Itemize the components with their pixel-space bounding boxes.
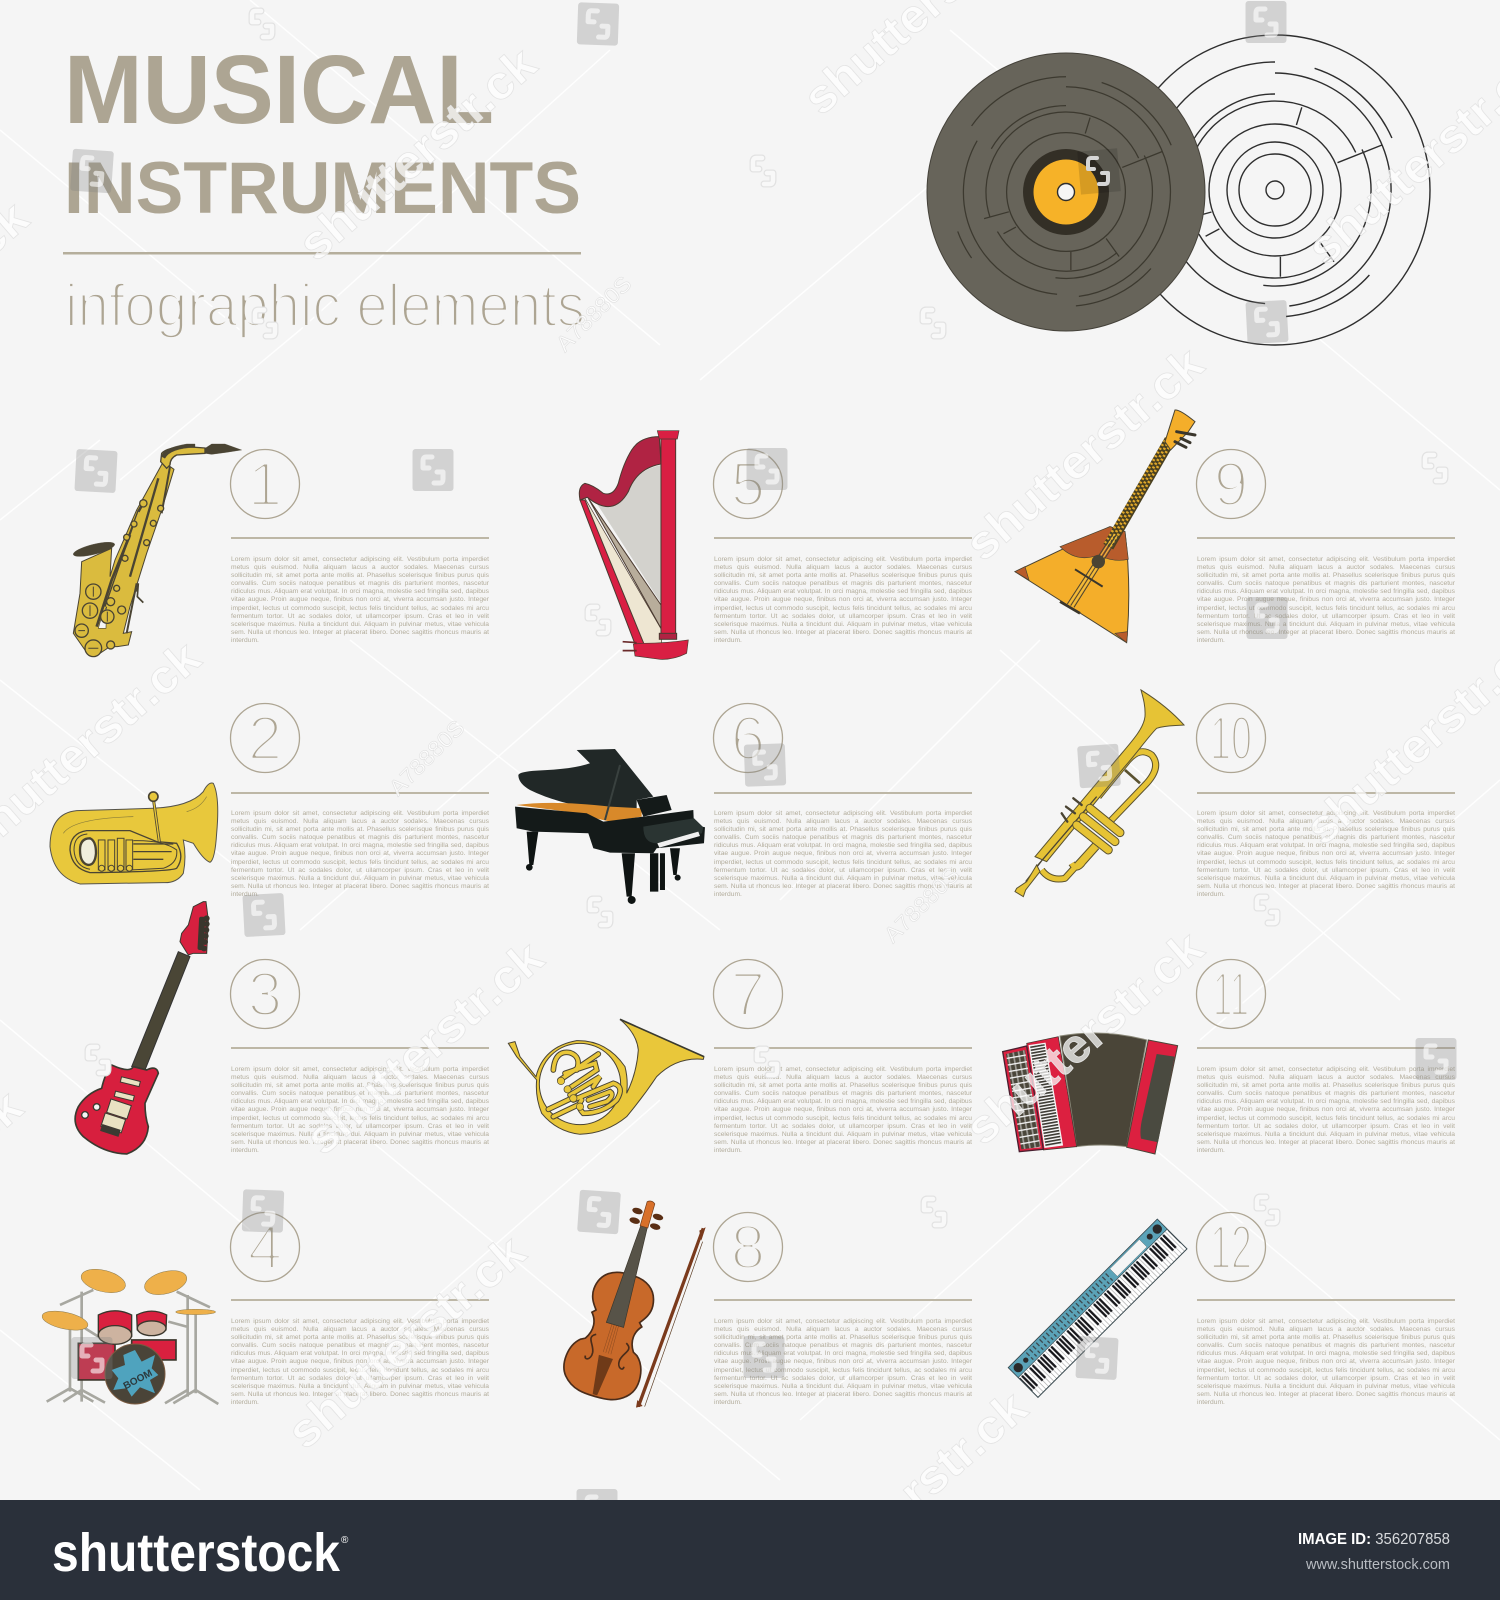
text block 10: imperdiet, lectus ut commodo suscipit, lectus felis tincidunt tellus, ac sodales mi arcu [1197, 859, 1455, 866]
text block 2 [231, 810, 489, 898]
text block 7: ridiculus mus. Aliquam erat volutpat. In orci magna, molestie sed fringilla sed, dapibus [714, 1098, 972, 1105]
text block 1: scelerisque maximus. Nulla a tincidunt dui. Aliquam in pulvinar metus, vitae vehicula [231, 621, 489, 628]
text block 10: Lorem ipsum dolor sit amet, consectetur adipiscing elit. Vestibulum porta imperdiet [1197, 810, 1455, 817]
text block 1: convallis. Cum sociis natoque penatibus et magnis dis parturient montes, nascetur [231, 580, 489, 587]
watermark: image code repeats: A78880S [551, 271, 636, 357]
text block 1: fermentum tortor. Ut ac sodales dolor, ut ullamcorper ipsum. Cras et leo in velit [231, 613, 489, 620]
subtitle: infographic elements: infographic elements [65, 272, 585, 339]
text block 1: ridiculus mus. Aliquam erat volutpat. In orci magna, molestie sed fringilla sed, dapibus [231, 588, 489, 595]
text block 3: sollicitudin mi, sit amet porta ante mollis at. Phasellus scelerisque finibus purus quis [231, 1082, 489, 1089]
text block 8 [714, 1318, 972, 1406]
text block 2: Lorem ipsum dolor sit amet, consectetur adipiscing elit. Vestibulum porta imperdiet [231, 810, 489, 817]
text block 5: Lorem ipsum dolor sit amet, consectetur adipiscing elit. Vestibulum porta imperdiet [714, 556, 972, 563]
number badge 5 [714, 450, 782, 520]
text block 6: sollicitudin mi, sit amet porta ante mollis at. Phasellus scelerisque finibus purus quis [714, 826, 972, 833]
title divider rule [63, 252, 581, 254]
text block 3: ridiculus mus. Aliquam erat volutpat. In orci magna, molestie sed fringilla sed, dapibus [231, 1098, 489, 1105]
text block 11: sollicitudin mi, sit amet porta ante mollis at. Phasellus scelerisque finibus purus quis [1197, 1082, 1455, 1089]
number badge 7 [714, 960, 782, 1030]
text block 3: sem. Nulla ut rhoncus leo. Integer at placerat libero. Donec sagittis rhoncus mauris at [231, 1139, 489, 1146]
text block 7 [714, 1066, 972, 1154]
icon: vinyl record [927, 53, 1205, 331]
icon: electric guitar [75, 902, 210, 1154]
footer registered mark: ® [341, 1535, 349, 1546]
text block 9: sollicitudin mi, sit amet porta ante mollis at. Phasellus scelerisque finibus purus quis [1197, 572, 1455, 579]
text block 6: interdum. [714, 891, 742, 898]
text block 4: metus quis euismod. Nulla aliquam lacus a auctor sodales. Maecenas cursus [231, 1326, 489, 1333]
watermark: shutterstock repeats: shutterstr.ck [955, 336, 1214, 571]
text block 10: ridiculus mus. Aliquam erat volutpat. In orci magna, molestie sed fringilla sed, dapibus [1197, 842, 1455, 849]
text block 1: metus quis euismod. Nulla aliquam lacus a auctor sodales. Maecenas cursus [231, 564, 489, 571]
icon: accordion [1003, 1033, 1178, 1154]
title: MUSICAL: MUSICAL [64, 35, 494, 144]
text block 5: vitae augue. Proin augue neque, finibus non orci at, viverra accumsan justo. Integer [714, 596, 972, 603]
text block 3: metus quis euismod. Nulla aliquam lacus a auctor sodales. Maecenas cursus [231, 1074, 489, 1081]
icon: harp [579, 431, 688, 659]
text block 11 [1197, 1066, 1455, 1154]
icon: outline record disc [1120, 35, 1430, 345]
watermark: image code repeats [384, 271, 964, 948]
text block 7: fermentum tortor. Ut ac sodales dolor, ut ullamcorper ipsum. Cras et leo in velit [714, 1123, 972, 1130]
text block 6: metus quis euismod. Nulla aliquam lacus a auctor sodales. Maecenas cursus [714, 818, 972, 825]
footer logo: shutterstock [52, 1523, 341, 1583]
text block 4: convallis. Cum sociis natoque penatibus et magnis dis parturient montes, nascetur [231, 1342, 489, 1349]
text block 1: sem. Nulla ut rhoncus leo. Integer at placerat libero. Donec sagittis rhoncus mauris at [231, 629, 489, 636]
text block 1: sollicitudin mi, sit amet porta ante mollis at. Phasellus scelerisque finibus purus quis [231, 572, 489, 579]
text block 11: vitae augue. Proin augue neque, finibus non orci at, viverra accumsan justo. Integer [1197, 1106, 1455, 1113]
text block 8: imperdiet, lectus ut commodo suscipit, lectus felis tincidunt tellus, ac sodales mi arcu [714, 1367, 972, 1374]
text block 11: imperdiet, lectus ut commodo suscipit, lectus felis tincidunt tellus, ac sodales mi arcu [1197, 1115, 1455, 1122]
text block 9: Lorem ipsum dolor sit amet, consectetur adipiscing elit. Vestibulum porta imperdiet [1197, 556, 1455, 563]
text block 11: sem. Nulla ut rhoncus leo. Integer at placerat libero. Donec sagittis rhoncus mauris at [1197, 1139, 1455, 1146]
number badge 5: 5 [731, 450, 765, 520]
text block 9: metus quis euismod. Nulla aliquam lacus a auctor sodales. Maecenas cursus [1197, 564, 1455, 571]
text block 9: sem. Nulla ut rhoncus leo. Integer at placerat libero. Donec sagittis rhoncus mauris at [1197, 629, 1455, 636]
number badge 11 [1196, 960, 1266, 1030]
text block 3: scelerisque maximus. Nulla a tincidunt dui. Aliquam in pulvinar metus, vitae vehicula [231, 1131, 489, 1138]
text block 7: scelerisque maximus. Nulla a tincidunt dui. Aliquam in pulvinar metus, vitae vehicula [714, 1131, 972, 1138]
text block 5: sem. Nulla ut rhoncus leo. Integer at placerat libero. Donec sagittis rhoncus mauris at [714, 629, 972, 636]
text block 4: ridiculus mus. Aliquam erat volutpat. In orci magna, molestie sed fringilla sed, dapibus [231, 1350, 489, 1357]
text block 4: scelerisque maximus. Nulla a tincidunt dui. Aliquam in pulvinar metus, vitae vehicula [231, 1383, 489, 1390]
text block 4: Lorem ipsum dolor sit amet, consectetur adipiscing elit. Vestibulum porta imperdiet [231, 1318, 489, 1325]
text block 7: interdum. [714, 1147, 742, 1154]
text block 4: imperdiet, lectus ut commodo suscipit, lectus felis tincidunt tellus, ac sodales mi arcu [231, 1367, 489, 1374]
text block 5: scelerisque maximus. Nulla a tincidunt dui. Aliquam in pulvinar metus, vitae vehicula [714, 621, 972, 628]
text block 2: interdum. [231, 891, 259, 898]
text block 8: interdum. [714, 1399, 742, 1406]
number badge 3 [230, 960, 300, 1030]
watermark: image code repeats: A78880S [384, 715, 469, 801]
text block 12: Lorem ipsum dolor sit amet, consectetur adipiscing elit. Vestibulum porta imperdiet [1197, 1318, 1455, 1325]
icon: violin and bow [557, 1190, 706, 1408]
text block 10: sem. Nulla ut rhoncus leo. Integer at placerat libero. Donec sagittis rhoncus mauris at [1197, 883, 1455, 890]
text block 6: Lorem ipsum dolor sit amet, consectetur adipiscing elit. Vestibulum porta imperdiet [714, 810, 972, 817]
text block 9: scelerisque maximus. Nulla a tincidunt dui. Aliquam in pulvinar metus, vitae vehicula [1197, 621, 1455, 628]
text block 6 [714, 810, 972, 898]
text block 12: convallis. Cum sociis natoque penatibus et magnis dis parturient montes, nascetur [1197, 1342, 1455, 1349]
text block 9 [1197, 556, 1455, 644]
text block 1: imperdiet, lectus ut commodo suscipit, lectus felis tincidunt tellus, ac sodales mi arcu [231, 605, 489, 612]
icon: grand piano [515, 749, 705, 904]
icon: drum kit [40, 1265, 218, 1404]
text block 6: scelerisque maximus. Nulla a tincidunt dui. Aliquam in pulvinar metus, vitae vehicula [714, 875, 972, 882]
watermark: image code repeats: A78880S [879, 862, 964, 948]
text block 2: sem. Nulla ut rhoncus leo. Integer at placerat libero. Donec sagittis rhoncus mauris at [231, 883, 489, 890]
text block 2: convallis. Cum sociis natoque penatibus et magnis dis parturient montes, nascetur [231, 834, 489, 841]
text block 5: fermentum tortor. Ut ac sodales dolor, ut ullamcorper ipsum. Cras et leo in velit [714, 613, 972, 620]
text block 10: fermentum tortor. Ut ac sodales dolor, ut ullamcorper ipsum. Cras et leo in velit [1197, 867, 1455, 874]
number badge 1 [230, 450, 300, 520]
text block 3: interdum. [231, 1147, 259, 1154]
text block 12: sem. Nulla ut rhoncus leo. Integer at placerat libero. Donec sagittis rhoncus mauris at [1197, 1391, 1455, 1398]
text block 5: imperdiet, lectus ut commodo suscipit, lectus felis tincidunt tellus, ac sodales mi arcu [714, 605, 972, 612]
text block 6: fermentum tortor. Ut ac sodales dolor, ut ullamcorper ipsum. Cras et leo in velit [714, 867, 972, 874]
text block 11: metus quis euismod. Nulla aliquam lacus a auctor sodales. Maecenas cursus [1197, 1074, 1455, 1081]
text block 2: metus quis euismod. Nulla aliquam lacus a auctor sodales. Maecenas cursus [231, 818, 489, 825]
icon: drum kit: BOOM [122, 1368, 154, 1392]
text block 1: Lorem ipsum dolor sit amet, consectetur adipiscing elit. Vestibulum porta imperdiet [231, 556, 489, 563]
text block 5: metus quis euismod. Nulla aliquam lacus a auctor sodales. Maecenas cursus [714, 564, 972, 571]
watermark: shutterstock repeats: shutterstr.ck [295, 930, 554, 1165]
text block 3: vitae augue. Proin augue neque, finibus non orci at, viverra accumsan justo. Integer [231, 1106, 489, 1113]
text block 9: imperdiet, lectus ut commodo suscipit, lectus felis tincidunt tellus, ac sodales mi arcu [1197, 605, 1455, 612]
text block 3: convallis. Cum sociis natoque penatibus et magnis dis parturient montes, nascetur [231, 1090, 489, 1097]
text block 5: convallis. Cum sociis natoque penatibus et magnis dis parturient montes, nascetur [714, 580, 972, 587]
text block 11: ridiculus mus. Aliquam erat volutpat. In orci magna, molestie sed fringilla sed, dapibus [1197, 1098, 1455, 1105]
number badge 10: 10 [1210, 704, 1252, 774]
text block 11: interdum. [1197, 1147, 1225, 1154]
watermark: outline logos [88, 11, 1445, 1225]
number badge 4 [230, 1212, 300, 1282]
footer image id: IMAGE ID: 356207858 [1298, 1531, 1450, 1548]
text block 6: vitae augue. Proin augue neque, finibus non orci at, viverra accumsan justo. Integer [714, 850, 972, 857]
icon: french horn [508, 1019, 704, 1134]
text block 12: sollicitudin mi, sit amet porta ante mollis at. Phasellus scelerisque finibus purus quis [1197, 1334, 1455, 1341]
text block 3: fermentum tortor. Ut ac sodales dolor, ut ullamcorper ipsum. Cras et leo in velit [231, 1123, 489, 1130]
text block 7: sollicitudin mi, sit amet porta ante mollis at. Phasellus scelerisque finibus purus quis [714, 1082, 972, 1089]
text block 5: ridiculus mus. Aliquam erat volutpat. In orci magna, molestie sed fringilla sed, dapibus [714, 588, 972, 595]
text block 10 [1197, 810, 1455, 898]
title: INSTRUMENTS: INSTRUMENTS [64, 148, 581, 229]
text block 8: vitae augue. Proin augue neque, finibus non orci at, viverra accumsan justo. Integer [714, 1358, 972, 1365]
text block 2: vitae augue. Proin augue neque, finibus non orci at, viverra accumsan justo. Integer [231, 850, 489, 857]
text block 7: sem. Nulla ut rhoncus leo. Integer at placerat libero. Donec sagittis rhoncus mauris at [714, 1139, 972, 1146]
number badge 12 [1196, 1212, 1266, 1282]
icon: balalaika [1015, 410, 1195, 643]
text block 6: imperdiet, lectus ut commodo suscipit, lectus felis tincidunt tellus, ac sodales mi arcu [714, 859, 972, 866]
text block 12: ridiculus mus. Aliquam erat volutpat. In orci magna, molestie sed fringilla sed, dapibus [1197, 1350, 1455, 1357]
text block 5: interdum. [714, 637, 742, 644]
number badge 1: 1 [248, 450, 282, 520]
text block 11: convallis. Cum sociis natoque penatibus et magnis dis parturient montes, nascetur [1197, 1090, 1455, 1097]
number badge 12: 12 [1210, 1214, 1252, 1282]
text block 8: fermentum tortor. Ut ac sodales dolor, ut ullamcorper ipsum. Cras et leo in velit [714, 1375, 972, 1382]
number badge 11: 11 [1213, 960, 1249, 1030]
text block 11: Lorem ipsum dolor sit amet, consectetur adipiscing elit. Vestibulum porta imperdiet [1197, 1066, 1455, 1073]
number badge 4: 4 [248, 1214, 282, 1282]
text block 4: sem. Nulla ut rhoncus leo. Integer at placerat libero. Donec sagittis rhoncus mauris at [231, 1391, 489, 1398]
text block 4: interdum. [231, 1399, 259, 1406]
text block 3: Lorem ipsum dolor sit amet, consectetur adipiscing elit. Vestibulum porta imperdiet [231, 1066, 489, 1073]
text block 8: sollicitudin mi, sit amet porta ante mollis at. Phasellus scelerisque finibus purus quis [714, 1334, 972, 1341]
text block 5: sollicitudin mi, sit amet porta ante mollis at. Phasellus scelerisque finibus purus quis [714, 572, 972, 579]
text block 10: interdum. [1197, 891, 1225, 898]
text block 10: metus quis euismod. Nulla aliquam lacus a auctor sodales. Maecenas cursus [1197, 818, 1455, 825]
icon: electronic keyboard [1008, 1219, 1187, 1397]
number badge 10 [1196, 704, 1266, 774]
text block 3: imperdiet, lectus ut commodo suscipit, lectus felis tincidunt tellus, ac sodales mi arcu [231, 1115, 489, 1122]
text block 1 [231, 556, 489, 644]
text block 8: Lorem ipsum dolor sit amet, consectetur adipiscing elit. Vestibulum porta imperdiet [714, 1318, 972, 1325]
text block 8: sem. Nulla ut rhoncus leo. Integer at placerat libero. Donec sagittis rhoncus mauris at [714, 1391, 972, 1398]
text block 11: fermentum tortor. Ut ac sodales dolor, ut ullamcorper ipsum. Cras et leo in velit [1197, 1123, 1455, 1130]
text block 2: scelerisque maximus. Nulla a tincidunt dui. Aliquam in pulvinar metus, vitae vehicula [231, 875, 489, 882]
text block 4 [231, 1318, 489, 1406]
text block 7: vitae augue. Proin augue neque, finibus non orci at, viverra accumsan justo. Integer [714, 1106, 972, 1113]
number badge 8: 8 [731, 1214, 765, 1282]
text block 5 [714, 556, 972, 644]
text block 1: interdum. [231, 637, 259, 644]
footer bar [0, 1500, 1500, 1600]
text block 10: vitae augue. Proin augue neque, finibus non orci at, viverra accumsan justo. Integer [1197, 850, 1455, 857]
number badge 6: 6 [731, 704, 765, 774]
watermark: shutterstock repeats: shutterstr.ck [955, 920, 1214, 1155]
watermark: shutterstock repeats: shutterstr.ck [277, 1224, 536, 1459]
text block 4: vitae augue. Proin augue neque, finibus non orci at, viverra accumsan justo. Integer [231, 1358, 489, 1365]
text block 8: metus quis euismod. Nulla aliquam lacus a auctor sodales. Maecenas cursus [714, 1326, 972, 1333]
text block 3 [231, 1066, 489, 1154]
text block 2: fermentum tortor. Ut ac sodales dolor, ut ullamcorper ipsum. Cras et leo in velit [231, 867, 489, 874]
footer url: www.shutterstock.com [1305, 1556, 1450, 1573]
text block 11: scelerisque maximus. Nulla a tincidunt dui. Aliquam in pulvinar metus, vitae vehicula [1197, 1131, 1455, 1138]
number badge 7: 7 [731, 960, 765, 1030]
text block 6: convallis. Cum sociis natoque penatibus et magnis dis parturient montes, nascetur [714, 834, 972, 841]
text block 1: vitae augue. Proin augue neque, finibus non orci at, viverra accumsan justo. Integer [231, 596, 489, 603]
text block 12: vitae augue. Proin augue neque, finibus non orci at, viverra accumsan justo. Integer [1197, 1358, 1455, 1365]
text block 2: sollicitudin mi, sit amet porta ante mollis at. Phasellus scelerisque finibus purus quis [231, 826, 489, 833]
number badge 2: 2 [248, 704, 282, 774]
text block 12: scelerisque maximus. Nulla a tincidunt dui. Aliquam in pulvinar metus, vitae vehicula [1197, 1383, 1455, 1390]
text block 4: fermentum tortor. Ut ac sodales dolor, ut ullamcorper ipsum. Cras et leo in velit [231, 1375, 489, 1382]
text block 12: imperdiet, lectus ut commodo suscipit, lectus felis tincidunt tellus, ac sodales mi arcu [1197, 1367, 1455, 1374]
text block 2: imperdiet, lectus ut commodo suscipit, lectus felis tincidunt tellus, ac sodales mi arcu [231, 859, 489, 866]
text block 8: scelerisque maximus. Nulla a tincidunt dui. Aliquam in pulvinar metus, vitae vehicula [714, 1383, 972, 1390]
text block 10: convallis. Cum sociis natoque penatibus et magnis dis parturient montes, nascetur [1197, 834, 1455, 841]
text block 12 [1197, 1318, 1455, 1406]
text block 9: ridiculus mus. Aliquam erat volutpat. In orci magna, molestie sed fringilla sed, dapibus [1197, 588, 1455, 595]
text block 9: convallis. Cum sociis natoque penatibus et magnis dis parturient montes, nascetur [1197, 580, 1455, 587]
number badge 2 [230, 704, 300, 774]
text block 7: metus quis euismod. Nulla aliquam lacus a auctor sodales. Maecenas cursus [714, 1074, 972, 1081]
number badge 8 [714, 1212, 782, 1282]
watermark: shutterstock repeats: shutterstr.ck [288, 36, 547, 271]
icon: trumpet [1015, 690, 1184, 897]
number badge 9 [1196, 450, 1266, 520]
text block 10: sollicitudin mi, sit amet porta ante mollis at. Phasellus scelerisque finibus purus quis [1197, 826, 1455, 833]
watermark: shutterstock repeats: rstr.ck [889, 1380, 1037, 1519]
text block 12: interdum. [1197, 1399, 1225, 1406]
text block 4: sollicitudin mi, sit amet porta ante mollis at. Phasellus scelerisque finibus purus quis [231, 1334, 489, 1341]
text block 9: fermentum tortor. Ut ac sodales dolor, ut ullamcorper ipsum. Cras et leo in velit [1197, 613, 1455, 620]
text block 8: convallis. Cum sociis natoque penatibus et magnis dis parturient montes, nascetur [714, 1342, 972, 1349]
text block 2: ridiculus mus. Aliquam erat volutpat. In orci magna, molestie sed fringilla sed, dapibus [231, 842, 489, 849]
text block 12: fermentum tortor. Ut ac sodales dolor, ut ullamcorper ipsum. Cras et leo in velit [1197, 1375, 1455, 1382]
text block 7: convallis. Cum sociis natoque penatibus et magnis dis parturient montes, nascetur [714, 1090, 972, 1097]
text block 6: sem. Nulla ut rhoncus leo. Integer at placerat libero. Donec sagittis rhoncus mauris at [714, 883, 972, 890]
text block 8: ridiculus mus. Aliquam erat volutpat. In orci magna, molestie sed fringilla sed, dapibus [714, 1350, 972, 1357]
number badge 6 [714, 704, 782, 774]
icon: tuba [50, 783, 218, 884]
text block 7: imperdiet, lectus ut commodo suscipit, lectus felis tincidunt tellus, ac sodales mi arcu [714, 1115, 972, 1122]
text block 12: metus quis euismod. Nulla aliquam lacus a auctor sodales. Maecenas cursus [1197, 1326, 1455, 1333]
text block 6: ridiculus mus. Aliquam erat volutpat. In orci magna, molestie sed fringilla sed, dapibus [714, 842, 972, 849]
text block 7: Lorem ipsum dolor sit amet, consectetur adipiscing elit. Vestibulum porta imperdiet [714, 1066, 972, 1073]
text block 9: interdum. [1197, 637, 1225, 644]
text block 9: vitae augue. Proin augue neque, finibus non orci at, viverra accumsan justo. Integer [1197, 596, 1455, 603]
number badge 9: 9 [1214, 450, 1248, 520]
text block 10: scelerisque maximus. Nulla a tincidunt dui. Aliquam in pulvinar metus, vitae vehicula [1197, 875, 1455, 882]
icon: saxophone [72, 444, 242, 657]
number badge 3: 3 [248, 960, 282, 1030]
